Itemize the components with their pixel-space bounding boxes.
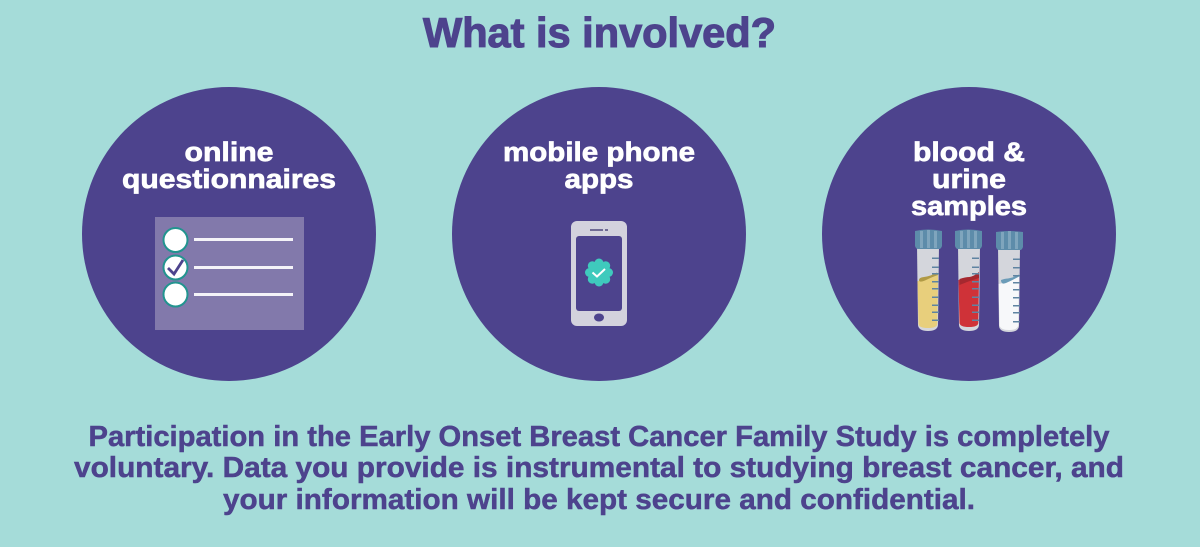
- icon: clear sample tube: [996, 231, 1023, 332]
- heading: blood and urine samples: blood &: [913, 137, 1025, 167]
- heading: blood and urine samples: [911, 137, 1027, 221]
- icon: smartphone: [571, 221, 627, 326]
- circle: phone background: [452, 87, 746, 381]
- text block: participation statement: your information will be kept secure and confidential.: [223, 484, 975, 516]
- icon: checklist: [155, 217, 304, 330]
- text block: participation statement: Participation in the Early Onset Breast Cancer Family Study is completely: [88, 421, 1110, 453]
- panel: blood and urine samples: [822, 87, 1116, 381]
- text block: participation statement: voluntary. Data you provide is instrumental to studying breast cancer, and: [74, 452, 1124, 484]
- title: What is involved?: [423, 9, 776, 56]
- heading: blood and urine samples: urine: [932, 164, 1006, 194]
- text block: participation statement: [74, 421, 1124, 516]
- circle: questionnaires background: [82, 87, 376, 381]
- heading: online questionnaires: online: [184, 137, 274, 167]
- heading: mobile phone apps: apps: [564, 164, 634, 194]
- heading: blood and urine samples: samples: [911, 191, 1027, 221]
- circle: samples background: [822, 87, 1116, 381]
- heading: mobile phone apps: mobile phone: [503, 137, 695, 167]
- heading: mobile phone apps: [503, 137, 695, 194]
- panel: mobile phone apps: [452, 87, 746, 381]
- icon: urine tube: [915, 230, 942, 331]
- heading: online questionnaires: [122, 137, 336, 194]
- icon: blood tube: [955, 230, 982, 331]
- panel: online questionnaires: [82, 87, 376, 381]
- heading: online questionnaires: questionnaires: [122, 164, 336, 194]
